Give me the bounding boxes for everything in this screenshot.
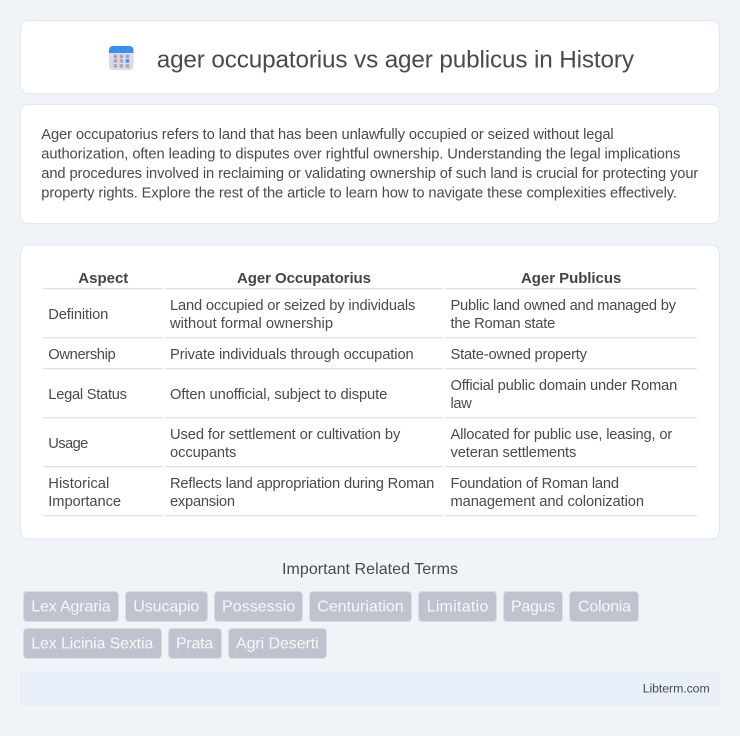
- table header row: Ager Publicus: [521, 270, 621, 287]
- row: historical importance: Foundation of Roman land: [450, 476, 619, 492]
- row: definition: the Roman state: [450, 316, 555, 332]
- row: usage: veteran settlements: [450, 445, 576, 461]
- footer credit: Libterm.com: [643, 682, 710, 696]
- row: ownership: State-owned property: [450, 347, 588, 363]
- intro text: authorization, often leading to disputes over rightful ownership. Understanding the legal implications: [41, 146, 680, 162]
- row: usage: Usage: [48, 436, 88, 452]
- row: historical importance: Historical: [48, 476, 109, 492]
- row: usage: Used for settlement or cultivation by: [170, 427, 401, 443]
- tag: Colonia: Colonia: [578, 599, 631, 616]
- intro text: Ager occupatorius refers to land that has been unlawfully occupied or seized without legal: [41, 127, 614, 143]
- table header row: Ager Occupatorius: [237, 270, 371, 287]
- footer bar: [20, 672, 720, 706]
- tag: Lex Licinia Sextia: [24, 628, 162, 658]
- row: legal status: Legal Status: [48, 387, 127, 403]
- tag: Agri Deserti: [228, 628, 326, 658]
- intro text: and procedures involved in reclaiming or validating ownership of such land is crucial for protecting your: [41, 166, 698, 182]
- tag: Possessio: Possessio: [222, 599, 295, 616]
- row: definition: Public land owned and managed by: [450, 298, 677, 314]
- tag: Usucapio: Usucapio: [133, 599, 199, 616]
- tag: Limitatio: [418, 592, 496, 622]
- tag: Pagus: Pagus: [511, 599, 555, 616]
- tag: Possessio: [214, 592, 302, 622]
- tag: Prata: [168, 628, 222, 658]
- table header row: [43, 270, 697, 289]
- tag: Lex Agraria: [24, 592, 118, 622]
- row: ownership: Ownership: [48, 347, 116, 363]
- tag: Limitatio: Limitatio: [427, 599, 488, 616]
- row: historical importance: [43, 476, 697, 516]
- tag: Usucapio: [126, 592, 208, 622]
- intro panel: [20, 104, 720, 224]
- row: historical importance: management and colonization: [450, 494, 644, 510]
- tag: Lex Licinia Sextia: Lex Licinia Sextia: [31, 636, 153, 653]
- tag: Lex Agraria: Lex Agraria: [31, 599, 111, 616]
- row: legal status: Often unofficial, subject to dispute: [170, 387, 387, 403]
- row: legal status: law: [450, 396, 472, 412]
- icon: calendar: [109, 46, 134, 70]
- intro text: [41, 127, 698, 201]
- row: historical importance: expansion: [170, 494, 235, 510]
- row: definition: Definition: [48, 307, 108, 323]
- row: usage: Allocated for public use, leasing, or: [450, 427, 672, 443]
- tag: Centuriation: Centuriation: [317, 599, 404, 616]
- row: ownership: Private individuals through occupation: [170, 347, 414, 363]
- related terms heading: Important Related Terms: [282, 561, 458, 578]
- row: definition: without formal ownership: [169, 316, 333, 332]
- row: legal status: Official public domain under Roman: [450, 378, 677, 394]
- tag: Agri Deserti: Agri Deserti: [236, 636, 319, 653]
- tag: Colonia: [570, 592, 638, 622]
- row: legal status: [43, 378, 697, 418]
- tag: Pagus: [504, 592, 562, 622]
- row: ownership: [43, 347, 697, 369]
- intro text: property rights. Explore the rest of the article to learn how to navigate these complexities effectively.: [41, 185, 677, 201]
- title: ager occupatorius vs ager publicus in History: [157, 46, 635, 73]
- tag: Prata: Prata: [176, 636, 213, 653]
- tag: Centuriation: [310, 592, 412, 622]
- table header row: Aspect: [78, 270, 128, 287]
- row: definition: [43, 298, 697, 338]
- comparison table panel: [20, 245, 720, 539]
- row: usage: occupants: [170, 445, 236, 461]
- row: historical importance: Reflects land appropriation during Roman: [170, 476, 434, 492]
- row: historical importance: Importance: [48, 494, 121, 510]
- related terms tags: [24, 592, 638, 658]
- row: definition: Land occupied or seized by individuals: [170, 298, 415, 314]
- header panel: [20, 20, 720, 94]
- row: usage: [43, 427, 697, 467]
